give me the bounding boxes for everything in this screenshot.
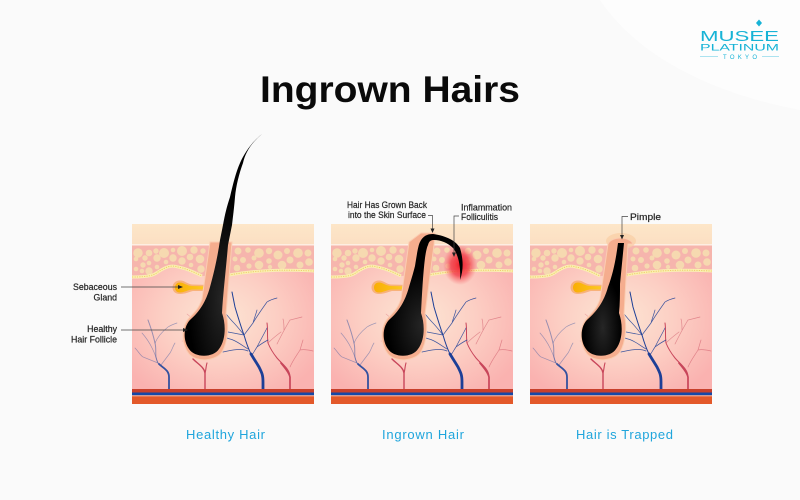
- label: inflammation folliculitis: Folliculitis: [461, 212, 499, 222]
- pimple bump: [606, 233, 636, 249]
- follicle sheath: [183, 242, 232, 360]
- panel: hair is trapped: [530, 224, 712, 404]
- follicle sheath: [382, 233, 435, 360]
- label: healthy hair follicle: Hair Follicle: [71, 334, 117, 344]
- label: healthy hair follicle: [71, 324, 188, 344]
- label: hair has grown back: into the Skin Surface: [348, 210, 426, 220]
- label: pimple: [620, 212, 661, 240]
- hair shaft and bulb: [185, 134, 262, 356]
- logo: Musee Platinum Tokyo: [700, 20, 779, 61]
- label: hair has grown back: [347, 200, 434, 233]
- logo: Musee Platinum Tokyo: TOKYO: [723, 55, 757, 61]
- caption: hair is trapped: Hair is Trapped: [576, 427, 673, 442]
- caption: ingrown hair: Ingrown Hair: [382, 427, 465, 442]
- follicle sheath: [581, 238, 633, 360]
- label: healthy hair follicle: Healthy: [87, 324, 118, 334]
- label: pimple: Pimple: [630, 212, 661, 222]
- trapped hair shaft and bulb: [582, 243, 624, 356]
- label: hair has grown back: Hair Has Grown Back: [347, 200, 428, 210]
- ingrown hair shaft and bulb: [384, 234, 463, 356]
- labels: ingrown hair: [347, 200, 512, 257]
- inflammation glow: [443, 245, 477, 285]
- caption: healthy hair: Healthy Hair: [186, 427, 266, 442]
- label: sebaceous gland: Gland: [94, 292, 117, 302]
- labels: healthy hair: [71, 282, 188, 344]
- panel: healthy hair: [132, 134, 314, 404]
- label: sebaceous gland: [73, 282, 183, 302]
- title: Ingrown Hairs: [260, 69, 520, 110]
- logo: Musee Platinum Tokyo: MUSEE: [700, 28, 779, 45]
- panel: ingrown hair: [331, 224, 513, 404]
- label: inflammation folliculitis: Inflammation: [461, 202, 512, 212]
- logo: Musee Platinum Tokyo: PLATINUM: [700, 42, 779, 52]
- label: sebaceous gland: Sebaceous: [73, 282, 118, 292]
- label: inflammation folliculitis: [452, 202, 512, 257]
